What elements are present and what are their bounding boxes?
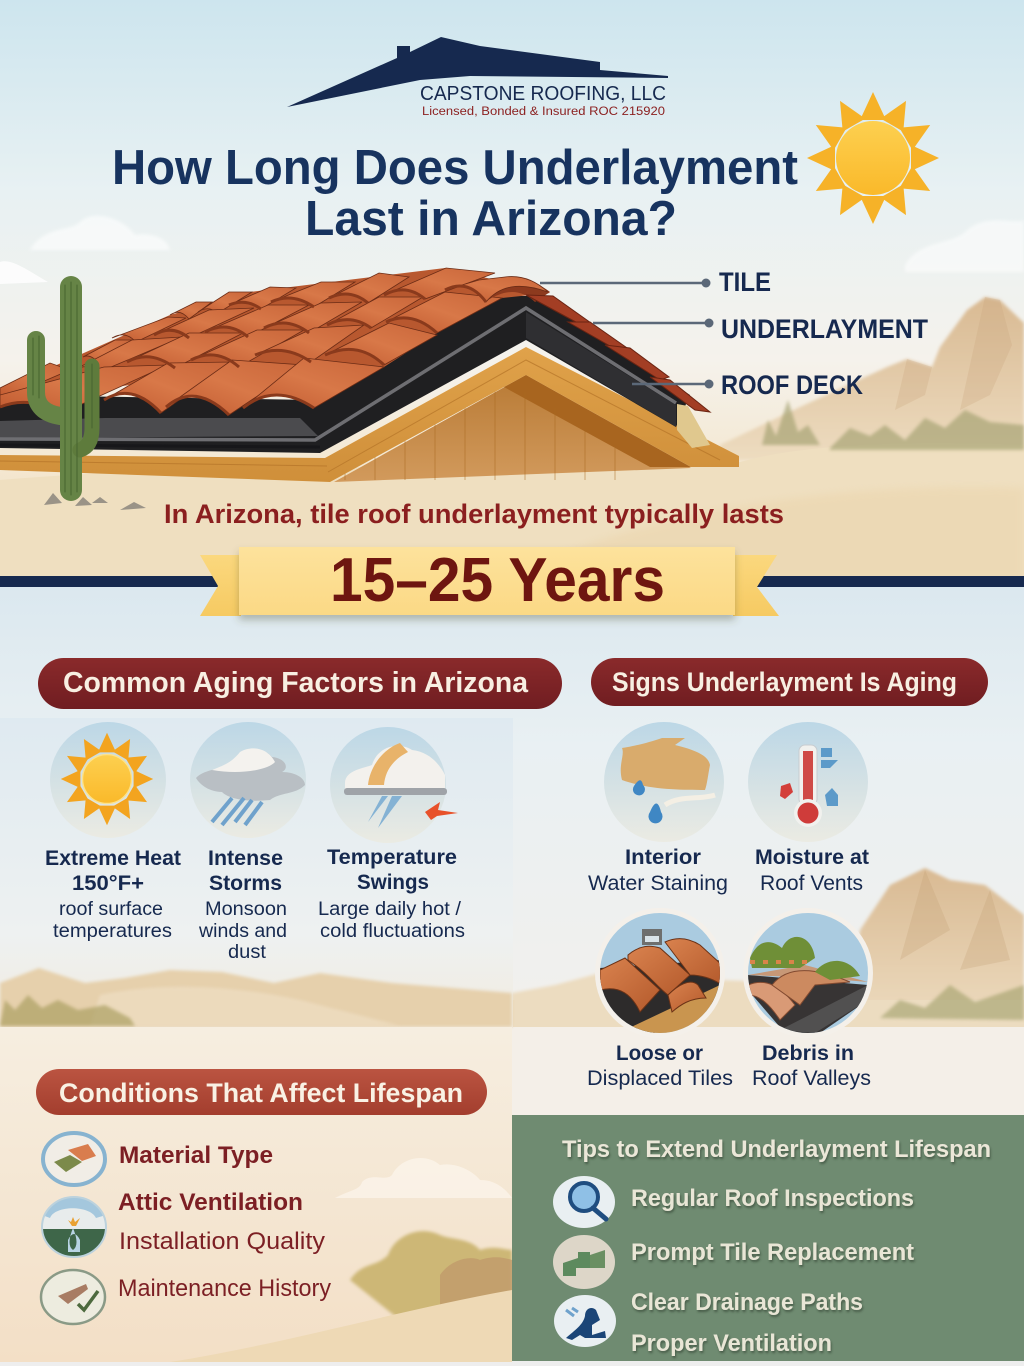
tips heading: Tips to Extend Underlayment Lifespan: [562, 1136, 991, 1163]
dune: [170, 1290, 512, 1362]
factor 1 text: roof surface: [59, 899, 163, 920]
company name: CAPSTONE ROOFING, LLC: [420, 83, 666, 105]
condition labels: Maintenance History: [118, 1275, 331, 1302]
factor 3 text: Large daily hot /: [318, 899, 462, 920]
tile lips: [0, 286, 486, 415]
hero background: sky and sand: [0, 0, 1024, 580]
factor 3 text: cold fluctuations: [320, 921, 465, 942]
sign labels: Roof Vents: [760, 872, 863, 895]
insulation: [677, 404, 710, 448]
heading pill: [36, 1069, 487, 1115]
banner: 15-25 years: [200, 546, 779, 616]
bush: [350, 1231, 512, 1320]
sign labels: Displaced Tiles: [587, 1067, 733, 1090]
heading pill: [591, 658, 988, 706]
condition labels: Material Type: [119, 1142, 273, 1169]
sign labels: Interior: [625, 846, 701, 869]
icon: loose tiles: [595, 908, 725, 1040]
tagline: In Arizona, tile roof underlayment typically lasts: [164, 499, 784, 529]
tip labels: [631, 1185, 914, 1357]
rocks: [44, 493, 146, 510]
icon: tile replacement: [553, 1235, 615, 1289]
tip labels: Clear Drainage Paths: [631, 1289, 863, 1316]
factor 2 text: Monsoon: [205, 899, 287, 920]
heading pill: Signs Underlayment Is Aging: [612, 667, 957, 697]
factor 3 text: Swings: [357, 871, 429, 894]
row 2 tiles: [0, 363, 70, 400]
title: How Long Does Underlayment: [112, 141, 798, 195]
logo: Capstone Roofing: [287, 37, 668, 118]
icon: water staining: [604, 722, 724, 842]
panel: conditions that affect lifespan: [0, 1027, 512, 1362]
roof deck wood: [0, 347, 739, 482]
underlayment layer: [0, 296, 690, 453]
panel: tips: [512, 1115, 1024, 1361]
layer labels: [719, 267, 928, 400]
icon: extreme heat: [50, 722, 166, 838]
icon: roof silhouette: [287, 37, 668, 107]
icon: attic ventilation: [42, 1197, 106, 1259]
cloud: [335, 1158, 512, 1198]
banner text: 15–25 Years: [330, 546, 665, 615]
factor 2 text: dust: [228, 942, 267, 963]
license line: Licensed, Bonded & Insured ROC 215920: [422, 106, 665, 118]
heading pill: Common Aging Factors in Arizona: [63, 667, 529, 699]
icon: intense storms: [190, 722, 306, 838]
factor 2 text: Storms: [209, 872, 282, 895]
panel: common aging factors: [38, 658, 562, 963]
factor 1 text: Extreme Heat: [45, 847, 181, 870]
icon: magnifier: [553, 1176, 615, 1228]
factor 3 text: [318, 846, 465, 942]
icon: thermometer: [748, 722, 868, 842]
factor 2 text: Intense: [208, 847, 283, 870]
sign labels: Debris in: [762, 1042, 854, 1065]
factor 1 text: temperatures: [53, 921, 172, 942]
factor 1 text: 150°F+: [72, 872, 144, 895]
factor 1 text: [45, 847, 181, 942]
heading pill: Conditions That Affect Lifespan: [59, 1078, 463, 1108]
sign labels: Moisture at: [755, 846, 869, 869]
roof cross-section illustration: [0, 268, 739, 482]
factor 2 text: winds and: [198, 921, 287, 942]
sign labels: [587, 846, 871, 1090]
sign labels: Loose or: [616, 1042, 703, 1065]
row 1 tiles: [0, 365, 168, 414]
layer labels: UNDERLAYMENT: [721, 314, 928, 344]
navy band: [0, 576, 1024, 587]
tip labels: Proper Ventilation: [631, 1330, 832, 1357]
row 3 tiles: [83, 340, 132, 370]
icon: material type: [43, 1133, 105, 1185]
rake tiles: [526, 295, 710, 412]
icon: temperature swings: [330, 727, 458, 843]
factor 3 text: Temperature: [327, 846, 457, 869]
label lines: [540, 278, 714, 388]
panel: signs of aging: [587, 658, 988, 1090]
lower background sections: [0, 587, 1024, 1117]
icon: drainage: [554, 1295, 616, 1347]
title: Last in Arizona?: [305, 192, 677, 246]
layer labels: TILE: [719, 267, 771, 297]
condition labels: Attic Ventilation: [118, 1189, 303, 1216]
ridge cap: [488, 277, 550, 302]
sign labels: Water Staining: [588, 872, 728, 895]
title: [112, 141, 798, 246]
condition labels: [118, 1142, 331, 1302]
icon: debris in valleys: [743, 908, 873, 1038]
icon: maintenance history: [41, 1270, 105, 1324]
row 4 tiles: [112, 317, 186, 342]
tile field: [0, 268, 550, 415]
heading pill: [38, 658, 562, 709]
factor 2 text: [198, 847, 287, 963]
icon: cactus: [33, 282, 92, 495]
tip labels: Prompt Tile Replacement: [631, 1239, 914, 1266]
layer labels: ROOF DECK: [721, 370, 863, 400]
icon: sun: [807, 92, 939, 224]
tip labels: Regular Roof Inspections: [631, 1185, 914, 1212]
condition labels: Installation Quality: [119, 1228, 325, 1255]
sign labels: Roof Valleys: [752, 1067, 871, 1090]
